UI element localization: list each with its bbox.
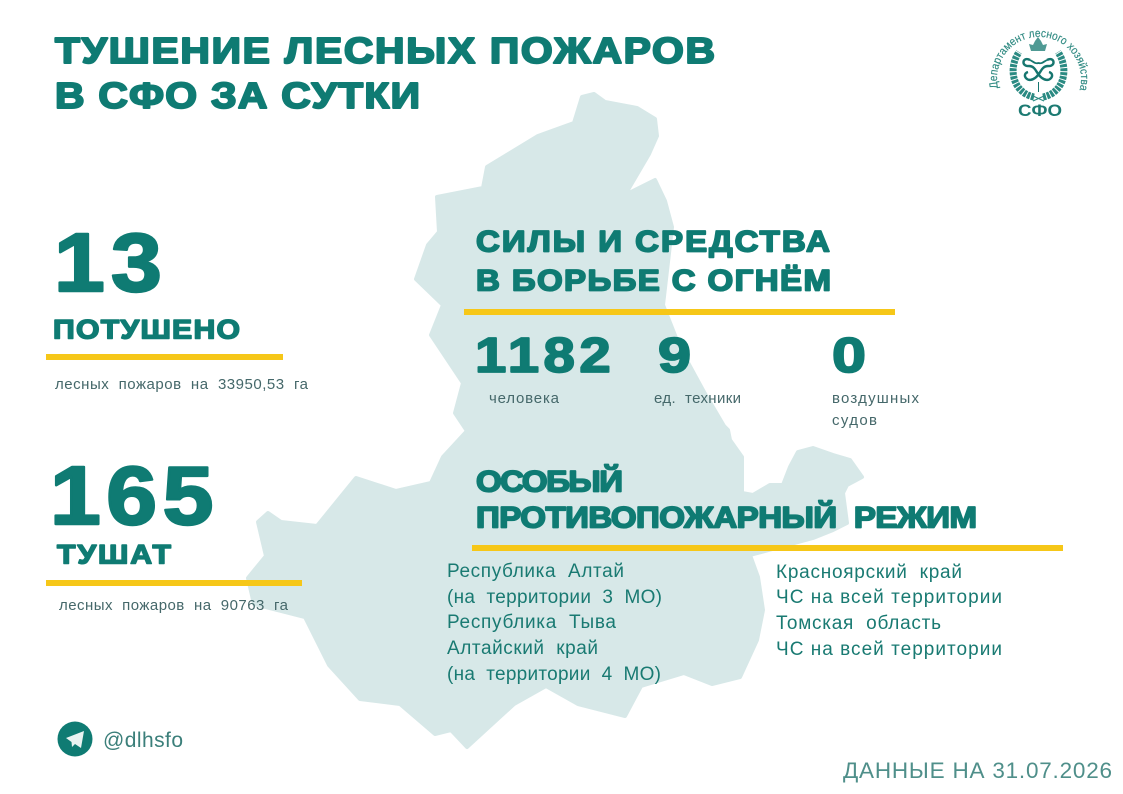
forces heading: [476, 225, 831, 297]
section: forces and resources: [464, 225, 920, 429]
logo: forestry department emblem: [989, 30, 1088, 120]
regime list: right column: Томская область: [776, 613, 941, 634]
extinguished description: лесных пожаров на 33950,53 га: [55, 376, 309, 393]
regime heading: ОСОБЫЙ: [476, 464, 623, 498]
regime list: right column: ЧС на всей территории: [776, 639, 1002, 660]
aircraft count: [832, 329, 920, 429]
logo monogram: [1023, 59, 1054, 92]
regime list: left column: Республика Алтай: [447, 561, 624, 582]
personnel count: человека: [489, 390, 560, 407]
title: [55, 31, 715, 116]
title: ТУШЕНИЕ ЛЕСНЫХ ПОЖАРОВ: [55, 31, 715, 71]
regime list: left column: Алтайский край: [447, 638, 598, 659]
title: В СФО ЗА СУТКИ: [55, 76, 420, 116]
number 165: 165: [50, 450, 213, 542]
aircraft count: 0: [832, 329, 866, 383]
logo wreath: [1013, 52, 1064, 101]
label: being fought: ТУШАТ: [57, 540, 172, 570]
icon: telegram: [58, 722, 92, 756]
regime heading: ПРОТИВОПОЖАРНЫЙ РЕЖИМ: [476, 500, 977, 534]
forces heading: В БОРЬБЕ С ОГНЁМ: [476, 264, 831, 297]
equipment count: [654, 329, 741, 407]
being fought description: лесных пожаров на 90763 га: [59, 597, 289, 614]
equipment count: 9: [658, 329, 691, 383]
regime list: right column: [776, 562, 1002, 660]
handle text: @dlhsfo: [103, 729, 183, 752]
forces heading: СИЛЫ И СРЕДСТВА: [476, 225, 830, 258]
data date: ДАННЫЕ НА 31.07.2026: [843, 758, 1112, 783]
label: extinguished: ПОТУШЕНО: [53, 315, 240, 345]
regime heading: [476, 464, 977, 534]
aircraft count: судов: [832, 412, 877, 429]
number 13: 13: [54, 217, 162, 309]
equipment count: ед. техники: [654, 390, 741, 407]
stat: extinguished fires: [46, 217, 309, 393]
personnel count: [475, 328, 611, 407]
regime list: left column: (на территории 3 МО): [447, 587, 662, 608]
regime list: left column: [447, 561, 662, 685]
section: special fire regime: [447, 464, 1063, 685]
personnel count: 1182: [475, 328, 611, 383]
stat: fires being fought: [46, 450, 302, 614]
logo ring text: Департамент лесного хозяйства: [989, 30, 1088, 90]
regime list: left column: Республика Тыва: [447, 612, 616, 633]
aircraft count: воздушных: [832, 390, 920, 407]
logo label: СФО: [1018, 101, 1062, 120]
logo crown: [1029, 37, 1047, 51]
telegram handle: [58, 722, 183, 756]
background map of the Siberian Federal District: [248, 94, 862, 747]
regime list: left column: (на территории 4 МО): [447, 664, 661, 685]
regime list: right column: Красноярский край: [776, 562, 962, 583]
regime list: right column: ЧС на всей территории: [776, 587, 1002, 608]
